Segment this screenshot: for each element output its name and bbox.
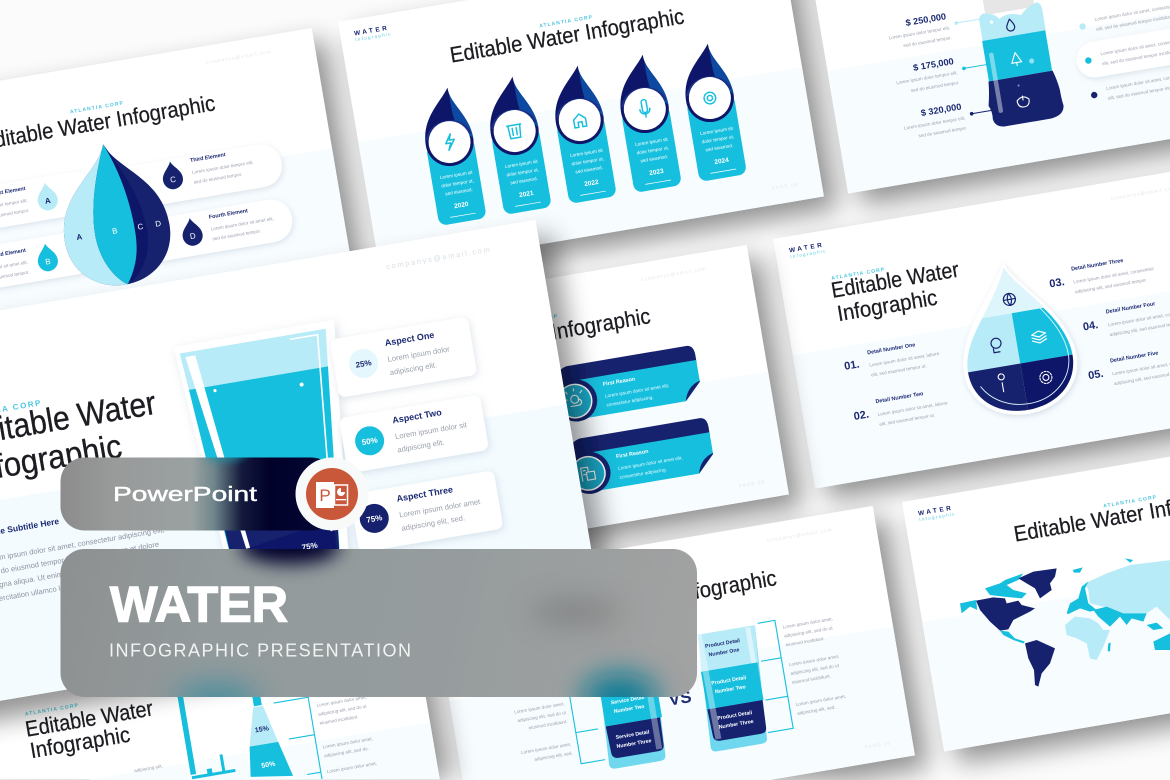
- list item one: [1078, 3, 1170, 34]
- big segmented drop: B: [111, 226, 118, 236]
- ribbon one: First Reason: [603, 376, 636, 388]
- small drop D: [180, 216, 204, 247]
- WATER heading: WATER: [110, 576, 288, 632]
- service bottle: Number Two: [613, 704, 645, 715]
- title: [829, 257, 965, 326]
- cyan pipe: [176, 672, 193, 774]
- drop card 2024: Lorem ipsum sit: [700, 126, 734, 136]
- detail 02: 02.: [853, 409, 870, 423]
- eyebrow: ATLANTIA CORP: [70, 100, 124, 115]
- logo: [354, 24, 392, 42]
- tap fitting: [189, 753, 236, 779]
- pill: first element: [0, 169, 99, 239]
- list item two: [1084, 38, 1170, 69]
- service bottle: Service Detail: [615, 729, 650, 741]
- right text block one: eiusmod incididunt.: [785, 636, 825, 647]
- pill: third element: [103, 141, 285, 213]
- highlighted pill: [1074, 5, 1170, 80]
- drop card 2024: dolor tempor ut,: [701, 134, 734, 144]
- logo: Infographic: [919, 511, 956, 522]
- left bracket: [564, 655, 607, 764]
- bracket: [274, 697, 322, 780]
- drop card 2023: sed eiusmod.: [640, 154, 668, 163]
- detail 01: 01.: [843, 358, 860, 373]
- world map: [960, 558, 1170, 687]
- title: [0, 385, 165, 491]
- connector three: [970, 108, 993, 116]
- slide: quartered drop with details: [773, 162, 1170, 502]
- card: aspect one: 25%: [355, 358, 372, 370]
- detail 01: Detail Number One: [867, 342, 916, 356]
- WATER glass panel: [60, 549, 697, 697]
- drop card 2022: Lorem ipsum sit: [570, 148, 604, 158]
- ribbon two: First Reason: [616, 449, 649, 460]
- card: aspect one: [330, 316, 477, 398]
- glass of water: [174, 320, 381, 623]
- ribbon two: Lorem ipsum dolor sit amet elit,: [618, 455, 683, 471]
- right text block two: adipiscing elit, sed do ut: [790, 663, 840, 676]
- card: aspect three: Aspect Three: [396, 484, 454, 504]
- detail 05: 05.: [1087, 368, 1104, 382]
- detail 04: [1081, 296, 1170, 341]
- logo: [789, 241, 827, 259]
- glass of water: 75%: [301, 541, 318, 552]
- detail 05: Detail Number Five: [1110, 350, 1159, 364]
- amount $ 250,000: $ 250,000: [905, 11, 947, 28]
- small drop C: [160, 160, 185, 191]
- slide: flask chart: [0, 600, 452, 780]
- pill: second element: [0, 228, 99, 299]
- big segmented drop: C: [137, 222, 144, 232]
- slide: main glass aspects: [0, 217, 616, 731]
- right text block one: Lorem ipsum dolor amet,: [782, 616, 833, 630]
- text block one: adipiscing elit, sed do ut: [318, 704, 368, 717]
- left text block two: adipiscing elit, sed.: [534, 750, 573, 762]
- small drop C: C: [169, 175, 177, 185]
- PowerPoint badge: P: [319, 486, 331, 505]
- service bottle: Service Detail: [610, 695, 646, 706]
- connector one: [954, 17, 979, 25]
- ribbon two: [563, 417, 716, 497]
- small drop D: D: [189, 231, 197, 241]
- third element body: Lorem ipsum dolor tempor elit,: [192, 160, 254, 175]
- product bottle: Product Detail: [711, 675, 747, 687]
- detail 03: Lorem ipsum dolor sit amet, consectetur: [1073, 266, 1155, 284]
- left text block one: eiusmod incididunt.: [528, 719, 568, 730]
- ribbon one: [550, 345, 703, 425]
- PowerPoint label: PowerPoint: [113, 483, 257, 506]
- bottle: [967, 0, 1065, 129]
- text block two: adipiscing elit, sed do.: [324, 746, 369, 758]
- drop card 2021: dolor tempor ut,: [506, 167, 539, 178]
- PowerPoint badge: [296, 458, 368, 530]
- title: Editable Water Infographic: [540, 565, 778, 630]
- VS label: VS: [667, 687, 693, 710]
- amount $ 250,000: sed do eiusmod tempor.: [903, 35, 952, 48]
- small drop B: B: [45, 257, 51, 267]
- drop card 2021: [482, 74, 552, 215]
- drop card 2023: dolor tempor ut,: [636, 145, 669, 156]
- PowerPoint glass panel: [60, 458, 321, 530]
- drop card 2021: Lorem ipsum sit: [505, 159, 539, 169]
- drop card 2020: [417, 85, 487, 226]
- quartered drop: [947, 252, 1085, 423]
- slide: water drop segments: [0, 26, 368, 366]
- card: aspect three: Lorem ipsum dolor amet: [399, 497, 482, 520]
- product bottle: Product Detail: [717, 710, 753, 722]
- drop card 2022: [547, 63, 617, 204]
- detail 04: Detail Number Four: [1105, 301, 1157, 315]
- drop card 2022: dolor tempor ut,: [571, 156, 604, 167]
- left text block one: adipiscing elit, sed do ut: [517, 710, 567, 723]
- connector two: [962, 63, 987, 70]
- text block three: Lorem ipsum dolor amet,: [326, 761, 377, 774]
- card: aspect two: Lorem ipsum dolor sit: [394, 420, 468, 441]
- amount $ 250,000: Lorem ipsum dolor tempor elit,: [888, 25, 950, 40]
- drop card 2024: 2024: [714, 157, 730, 166]
- amount $ 320,000: $ 320,000: [920, 101, 962, 118]
- fourth element body: sed do eiusmod tempor.: [212, 228, 261, 241]
- fourth element text: Fourth Element: [208, 208, 249, 221]
- amount $ 175,000: $ 175,000: [912, 56, 954, 73]
- slide: bottle amounts: [806, 0, 1170, 207]
- right text block three: adipiscing elit, sed.: [797, 705, 836, 716]
- detail 01: elit, sed eiusmod tempor ut.: [871, 363, 927, 378]
- detail 05: [1086, 345, 1170, 390]
- small drop A: [35, 181, 59, 212]
- ribbon two: consectetur adipiscing.: [619, 467, 667, 480]
- slide: product vs service: [429, 504, 929, 780]
- detail 04: 04.: [1082, 319, 1099, 333]
- slide: five water drop timeline: [338, 0, 838, 285]
- right text block one: adipiscing elit, sed do ut: [784, 625, 834, 639]
- amount $ 320,000: Lorem ipsum dolor tempor elit,: [904, 115, 966, 131]
- product bottle: [692, 625, 775, 752]
- logo: [918, 504, 956, 522]
- text block one: eiusmod incididunt.: [319, 714, 359, 726]
- email header: companys@email.com: [767, 527, 833, 544]
- title: Infographic: [28, 722, 132, 763]
- product bottle: Number One: [708, 647, 740, 658]
- detail 03: [1047, 253, 1156, 298]
- drop card 2023: [612, 52, 682, 193]
- page number: PAGE 04: [771, 182, 799, 192]
- service bottle: [590, 643, 672, 769]
- amount $ 320,000: [901, 101, 967, 141]
- drop card 2021: sed eiusmod.: [510, 176, 538, 185]
- service bottle: Number Three: [616, 738, 652, 750]
- right text block two: eiusmod incididunt.: [792, 673, 831, 685]
- text block one: Lorem ipsum dolor amet,: [316, 694, 367, 708]
- drop card 2020: sed eiusmod.: [445, 187, 473, 196]
- small drop B: [35, 242, 59, 273]
- card: aspect two: 50%: [361, 436, 378, 447]
- drop card 2022: 2022: [584, 179, 600, 188]
- title: Editable Water: [23, 695, 155, 742]
- eyebrow: ATLANTIA CORP: [831, 267, 886, 282]
- detail 01: [842, 339, 942, 382]
- third element text: Third Element: [190, 152, 226, 164]
- text block two: Lorem ipsum dolor amet,: [322, 736, 373, 749]
- right bracket: [750, 620, 793, 733]
- drop card 2023: Lorem ipsum sit: [635, 137, 669, 147]
- eyebrow: ATLANTIA CORP: [1103, 494, 1158, 509]
- presentation subtitle: INFOGRAPHIC PRESENTATION: [109, 640, 411, 660]
- big segmented drop: [50, 136, 178, 293]
- card: aspect three: 75%: [366, 513, 383, 525]
- detail 03: 03.: [1048, 276, 1066, 290]
- amount $ 250,000: [886, 11, 952, 50]
- amount $ 320,000: sed do eiusmod tempor.: [918, 125, 967, 138]
- drop card 2020: Lorem ipsum sit: [439, 170, 474, 180]
- detail 03: Detail Number Three: [1071, 258, 1124, 273]
- card: aspect one: adipiscing elit.: [389, 360, 438, 377]
- ribbon one: Lorem ipsum dolor sit amet elit,: [605, 383, 670, 399]
- card: aspect two: adipiscing elit.: [397, 438, 445, 454]
- detail 02: elit, sed eiusmod tempor ut.: [879, 412, 935, 427]
- title: Infographic: [835, 285, 939, 326]
- page number: PAGE 05: [738, 479, 766, 490]
- drop card 2023: 2023: [649, 168, 665, 177]
- product bottle: Product Detail: [705, 638, 741, 650]
- card: aspect three: adipiscing elit, sed.: [401, 513, 466, 533]
- card: aspect one: Lorem ipsum dolor: [387, 344, 451, 364]
- right text block three: Lorem ipsum dolor amet,: [795, 694, 846, 707]
- amount $ 175,000: Lorem ipsum dolor tempor elit,: [896, 70, 958, 85]
- fourth element body: Lorem ipsum dolor sit amet elit,: [210, 216, 274, 232]
- title: Editable Water Infographic: [413, 303, 652, 368]
- ribbon one: consectetur adipiscing.: [606, 395, 654, 408]
- logo: Infographic: [790, 248, 827, 259]
- card: aspect three: [350, 470, 503, 553]
- small drop A: A: [44, 196, 52, 206]
- third element body: sed do eiusmod tempor.: [193, 172, 243, 185]
- flask: 50%: [261, 761, 277, 770]
- detail 02: [851, 387, 950, 431]
- slide: reasons ribbons: [303, 243, 803, 583]
- list item three: [1090, 72, 1170, 103]
- email header: companys@email.com: [206, 49, 272, 66]
- drop card 2021: 2021: [519, 190, 534, 199]
- flask: [236, 685, 293, 780]
- slide: world map: [902, 425, 1170, 765]
- logo: WATER: [354, 25, 390, 37]
- eyebrow: ATLANTIA CORP: [504, 313, 559, 328]
- amount $ 175,000: [894, 56, 960, 95]
- title: [23, 695, 159, 763]
- page number: PAGE 06: [864, 740, 892, 751]
- amount $ 175,000: sed do eiusmod tempor.: [910, 80, 960, 93]
- email header: companys@email.com: [641, 266, 707, 283]
- eyebrow: ATLANTIA CORP: [25, 703, 79, 718]
- big segmented drop: D: [155, 219, 162, 229]
- logo: WATER: [789, 242, 825, 254]
- title: Editable Water: [829, 257, 961, 303]
- body text: adipiscing elit,: [134, 763, 163, 773]
- logo: Infographic: [355, 31, 392, 42]
- drop card 2020: 2020: [454, 201, 469, 210]
- eyebrow: ATLANTIA CORP: [539, 14, 594, 29]
- product bottle: Number Three: [718, 719, 754, 731]
- card: aspect one: Aspect One: [384, 330, 435, 348]
- right text block two: Lorem ipsum dolor amet,: [789, 654, 840, 667]
- detail 01: Lorem ipsum dolor sit amet, labore: [869, 351, 940, 368]
- drop card 2024: [677, 41, 747, 182]
- product bottle: Number Two: [715, 684, 746, 695]
- card: aspect two: Aspect Two: [392, 407, 443, 425]
- flask: 15%: [254, 725, 270, 735]
- logo: WATER: [918, 505, 954, 517]
- left text block one: Lorem ipsum dolor amet,: [514, 701, 565, 715]
- card: aspect two: [339, 394, 489, 474]
- detail 02: Lorem ipsum dolor sit amet, labore: [877, 400, 948, 417]
- drop card 2022: sed eiusmod.: [575, 165, 603, 174]
- left text block two: Lorem ipsum dolor amet,: [521, 742, 572, 755]
- detail 02: Detail Number Two: [875, 391, 925, 405]
- pill: fourth element: [112, 196, 296, 268]
- big segmented drop: A: [76, 232, 83, 242]
- drop card 2020: dolor tempor ut,: [441, 178, 474, 189]
- detail 03: adipiscing elit, sed eiusmod tempor.: [1075, 277, 1147, 294]
- drop card 2024: sed eiusmod.: [705, 143, 733, 152]
- email header: companys@email.com: [385, 245, 492, 271]
- title: Editable Water Infographic: [448, 3, 686, 68]
